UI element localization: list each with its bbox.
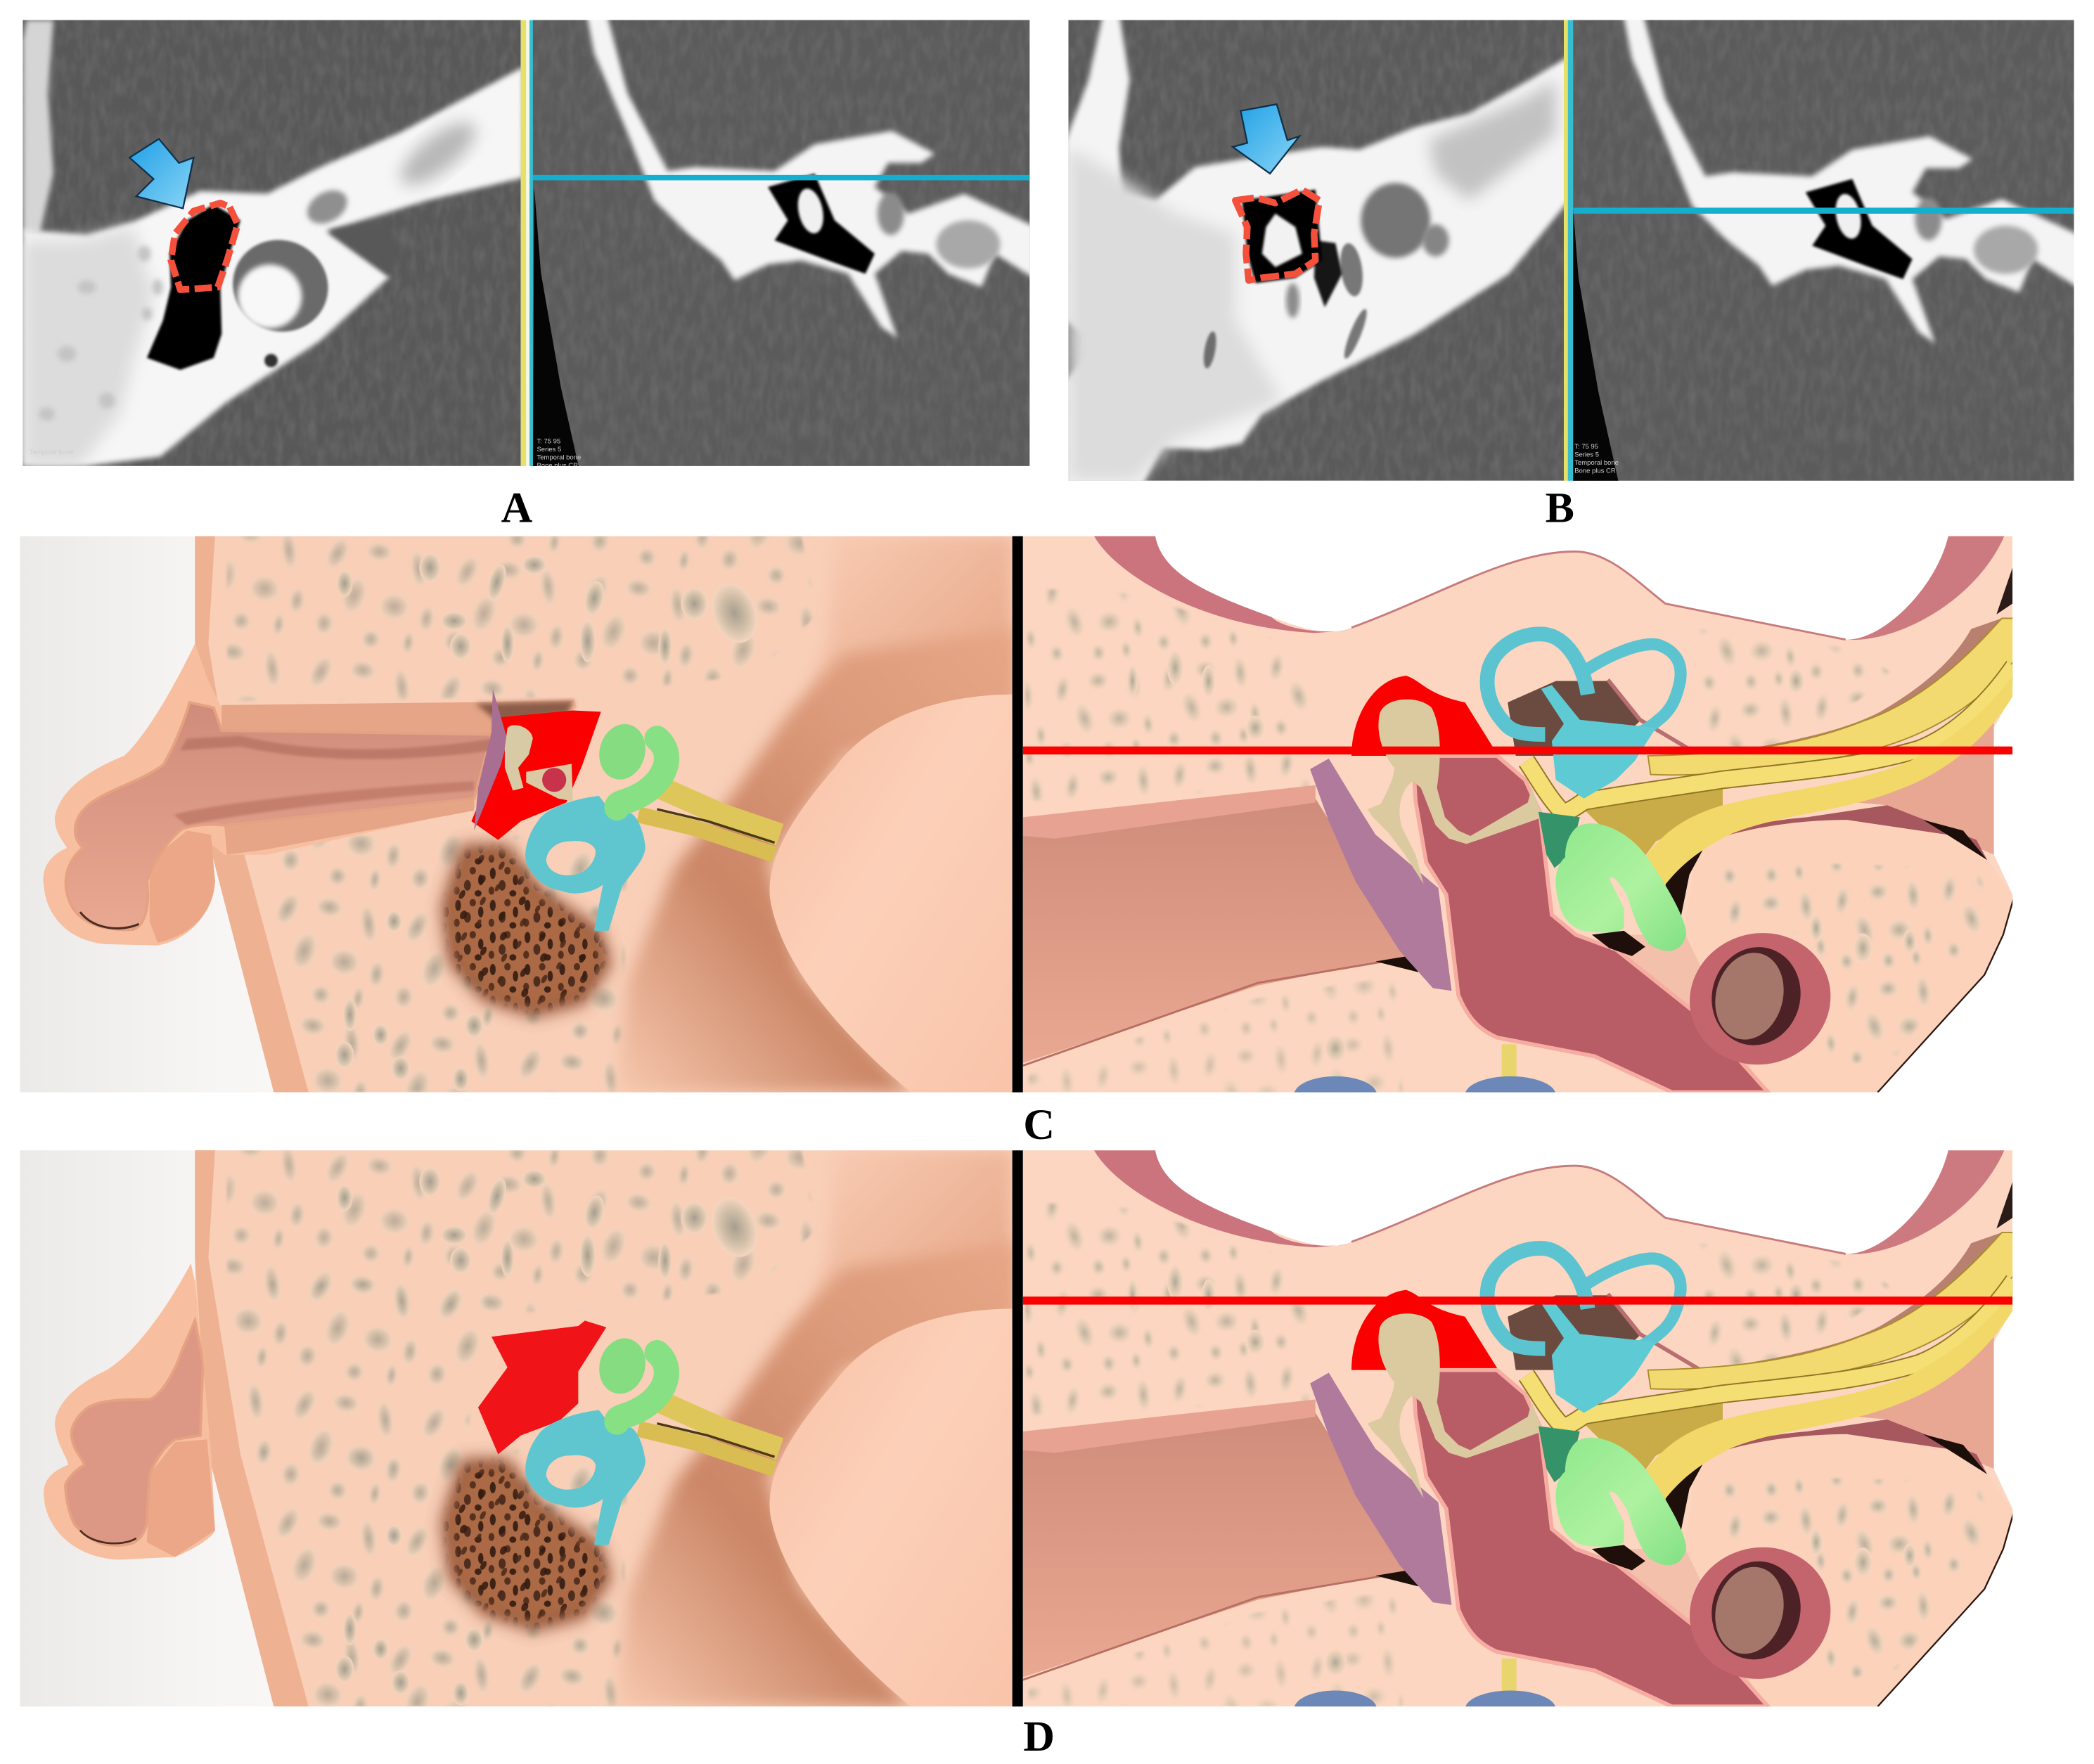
cochlea and semicircular canals in cyan: [1487, 634, 1681, 799]
green cochlear coil: [1556, 823, 1686, 951]
attic region in red: [471, 710, 601, 840]
D ear canal: [1023, 1399, 1418, 1680]
canal skin highlights: [180, 736, 494, 759]
petrous bone lower right: [1602, 805, 2014, 1093]
jugular sigmoid vessel: [1413, 756, 1768, 1093]
red reference line: [1023, 747, 2012, 754]
bone and soft tissue background: [20, 536, 1013, 1094]
inner ear cavity: [1508, 680, 1703, 757]
A divider: [521, 20, 534, 466]
D left-right divider: [1013, 1150, 1023, 1706]
D reduced auricle: [44, 1150, 240, 1559]
ossicles: [505, 725, 573, 801]
D green structures: [593, 1333, 667, 1422]
ear canal and auricle: [43, 643, 577, 946]
eardrum purple: [1310, 759, 1451, 991]
D dark green tissue: [1539, 1426, 1580, 1482]
dark green tissue behind cochlear nerve: [1539, 812, 1580, 868]
A right coronal CT view: T: 75 95: [537, 438, 560, 446]
upper and lower canal wall bands: [221, 701, 574, 737]
B arrow: [1233, 104, 1299, 174]
malleus incus stapes ossicle chain: [1368, 700, 1543, 884]
deep fold shadow and temporal lobe: [617, 536, 1015, 1093]
carotid artery ring: [1675, 918, 1846, 1081]
D pink band: [1703, 1232, 2002, 1375]
external auditory canal: [1023, 785, 1418, 1066]
A left axial CT view: Temporal bone: [30, 449, 74, 456]
D extra cavities where canal was closed: [227, 1282, 494, 1469]
C right model view: [1023, 536, 2014, 1114]
A right coronal CT view: Temporal bone: [537, 453, 581, 461]
D blue vessels: [1294, 1690, 1556, 1728]
D petrous bone: [1602, 1419, 2014, 1706]
label C: C: [1023, 1101, 1055, 1149]
D ossicle chain: [1368, 1313, 1543, 1498]
salmon soft tissue at right: [1843, 721, 1994, 855]
D right model view: [1023, 1150, 2014, 1728]
D carotid ring: [1675, 1531, 1846, 1694]
D cavity: [1508, 1294, 1703, 1372]
panel D: 3D anatomical model, after removal: [20, 1150, 2014, 1760]
facial and vestibulocochlear nerves: [1509, 618, 2014, 1081]
A air cell: [147, 205, 240, 370]
dark pink band beside nerves: [1703, 618, 2002, 761]
D skull bone: [1023, 1150, 2014, 1708]
blue vessels at the bottom: [1294, 1076, 1556, 1114]
A cyan reference line: [533, 175, 1029, 180]
mastoid air cell region: [441, 842, 615, 1017]
D fold shadow and temporal lobe: [617, 1150, 1015, 1706]
panel A: CT scan with outlined air space: [23, 0, 1041, 532]
canal lumen: [66, 702, 492, 929]
C left-right divider: [1013, 536, 1023, 1093]
right bone cavities: [1026, 588, 1896, 1093]
black gap below cochlea: [1592, 931, 1645, 956]
eardrum: [474, 689, 508, 830]
lower spongy bone cavities: [260, 836, 628, 1093]
semicircular green structures: [593, 719, 667, 808]
B air cell: [1242, 190, 1322, 283]
D green coil: [1556, 1438, 1686, 1565]
D bone and soft tissue background: [20, 1150, 1013, 1708]
back of the ear: [150, 830, 215, 943]
nerve bundle: [638, 788, 780, 855]
panel C: 3D anatomical model, before removal: [20, 536, 2014, 1149]
A red dashed outline: [171, 203, 238, 290]
D red dome: [1351, 1290, 1498, 1370]
D black gap: [1592, 1545, 1645, 1571]
D vessel: [1413, 1370, 1768, 1706]
skull bone with white air space above: [1023, 536, 2014, 1094]
A right coronal CT view: Bone plus CR: [537, 462, 578, 470]
label A: A: [501, 484, 533, 532]
D lower cavities: [260, 1450, 628, 1706]
D nerve bundle: [638, 1402, 780, 1469]
upper spongy bone cavities: [227, 536, 817, 701]
B cyan reference line: [1573, 207, 2074, 214]
auricle wall: [43, 643, 577, 946]
D left model view: [20, 1150, 1015, 1708]
A arrow: [129, 139, 193, 208]
label D: D: [1023, 1713, 1055, 1760]
B red dashed outline: [1235, 190, 1319, 281]
C left model view: [20, 536, 1015, 1094]
D cochlea and canals: [1487, 1248, 1681, 1412]
B divider: [1564, 20, 1574, 481]
A left axial CT view: [23, 20, 524, 466]
D obliterated cavity in red: [478, 1320, 606, 1454]
D soft tissue right: [1843, 1335, 1994, 1469]
D mastoid air cells: [441, 1455, 615, 1632]
D eardrum: [1310, 1372, 1451, 1605]
A right coronal CT view: [533, 20, 1029, 466]
B left axial CT view: [1066, 13, 1569, 487]
red attic dome: [1351, 676, 1498, 756]
panel B: CT scan with outlined air space: [1066, 0, 2079, 532]
A right coronal CT view: Series 5: [537, 446, 561, 453]
cochlea and vestibule in cyan: [527, 797, 644, 929]
D cochlea: [527, 1412, 644, 1544]
B right coronal CT view: [1571, 0, 2079, 506]
D red reference line: [1023, 1296, 2012, 1305]
D upper cavities: [227, 1150, 817, 1315]
D cavities: [1026, 1202, 1896, 1706]
label B: B: [1546, 484, 1574, 532]
D nerves: [1509, 1232, 2014, 1696]
